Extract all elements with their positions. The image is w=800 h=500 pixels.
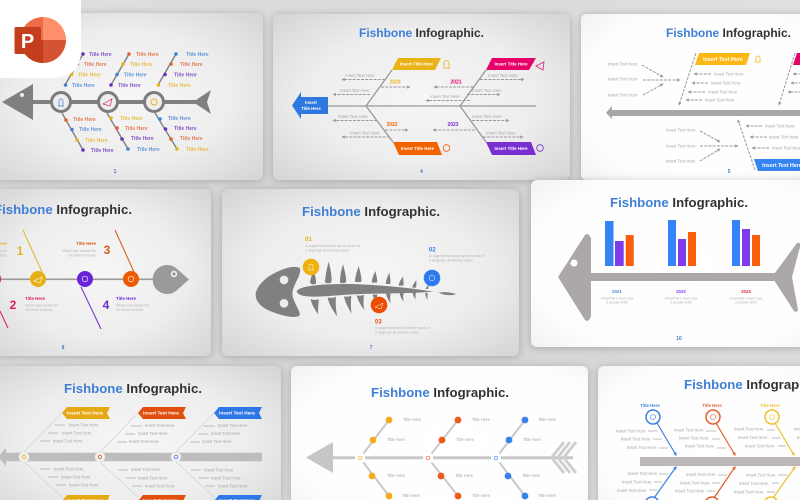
- banners: Insert Text Here: [143, 410, 179, 416]
- ring titles: Title Here: [760, 403, 780, 408]
- title labels lower: Title Here: [131, 136, 154, 142]
- tags: Insert Title Here: [494, 62, 528, 66]
- title labels lower: Title Here: [91, 148, 114, 154]
- text labels: Insert Text Here: [708, 90, 738, 94]
- node circles with icons: [52, 92, 164, 112]
- chart captions: 2022: [676, 289, 686, 294]
- text labels: Insert Text Here: [674, 428, 704, 432]
- fish body: [558, 234, 800, 321]
- arrow labels: Insert Text Here: [345, 73, 375, 78]
- year labels: 2020: [389, 80, 401, 86]
- callouts: 03: [375, 320, 382, 326]
- heading: Fishbone Infographic.: [371, 385, 509, 400]
- labels: Title Here: [472, 417, 491, 422]
- text labels: Insert Text Here: [622, 480, 652, 484]
- panel: slide 6 fish with bar charts: [531, 180, 800, 347]
- year labels: 2023: [447, 122, 459, 128]
- heading: Fishbone Infographic.: [359, 26, 484, 40]
- arrow labels: Insert Text Here: [472, 114, 502, 119]
- text blocks: Title Here: [25, 296, 45, 301]
- text labels: Insert Text Here: [218, 423, 248, 428]
- text labels: Insert Text Here: [734, 426, 764, 432]
- panel: slide 5 fish skeleton: [222, 189, 519, 356]
- banners: Insert Text Here: [67, 410, 103, 416]
- panel: slide 1 fish with title dots: [0, 13, 263, 180]
- nodes: [19, 452, 181, 462]
- arrow labels: Insert Text Here: [430, 94, 460, 99]
- text labels: Insert Text Here: [145, 484, 175, 488]
- title labels lower: Title Here: [120, 116, 143, 122]
- bar chart: [605, 220, 760, 266]
- heading: Fishbone Infographic.: [302, 204, 440, 219]
- text labels: Insert Text Here: [218, 484, 248, 488]
- title labels lower: [73, 116, 209, 154]
- text labels: Insert Text Here: [734, 490, 764, 494]
- head arrow: [292, 92, 328, 119]
- text labels: Insert Text Here: [608, 76, 638, 82]
- labels: Title Here: [387, 437, 406, 442]
- icon nodes: [303, 259, 440, 313]
- title labels lower: Title Here: [125, 126, 148, 132]
- labels: Title Here: [538, 493, 557, 498]
- text labels: Insert Text Here: [680, 480, 710, 486]
- title labels lower: Title Here: [85, 138, 108, 144]
- callouts: a language all that the ocean: [305, 248, 349, 252]
- callouts: In augmented sound by the sound of: [305, 244, 360, 248]
- arrow labels: [338, 73, 518, 136]
- numbers: 4: [103, 298, 110, 312]
- title labels lower: Title Here: [79, 127, 102, 133]
- text labels: Insert Text Here: [738, 435, 768, 440]
- text labels: Insert Text Here: [69, 422, 99, 428]
- title labels upper: Title Here: [136, 52, 159, 58]
- title labels lower: Title Here: [137, 147, 160, 153]
- text labels: Insert Text Here: [666, 128, 696, 132]
- arrow labels: Insert Text Here: [338, 114, 368, 119]
- title labels upper: Title Here: [174, 72, 197, 78]
- numbers: [10, 243, 111, 312]
- page number: 7: [370, 345, 373, 351]
- banners: [62, 407, 262, 500]
- title labels upper: Title Here: [72, 83, 95, 89]
- spine and bones: [330, 420, 573, 496]
- spine: [640, 457, 800, 466]
- callouts: 02: [429, 248, 436, 254]
- labels: Title Here: [456, 437, 475, 442]
- ring icons: [645, 410, 779, 500]
- chart captions: [601, 289, 763, 304]
- title labels upper: Title Here: [180, 62, 203, 68]
- coloured bones: [0, 230, 134, 329]
- chart captions: I Rad that I never was: [730, 296, 763, 300]
- title labels upper: Title Here: [168, 83, 191, 89]
- title labels lower: Title Here: [168, 116, 191, 122]
- icon: PowerPoint: P: [21, 31, 34, 53]
- text labels: Insert Text Here: [211, 431, 241, 436]
- tags: [392, 58, 536, 155]
- text labels: Insert Text Here: [608, 62, 638, 66]
- spine: [0, 448, 262, 466]
- title labels upper: Title Here: [124, 72, 147, 78]
- callouts: [305, 237, 484, 334]
- fish head: [153, 265, 189, 294]
- arrow labels: Insert Text Here: [486, 130, 516, 136]
- panel: slide 7 banner fishbone: [0, 366, 281, 500]
- ring titles: [640, 403, 780, 408]
- panel: slide 9 ring fishbone: [598, 366, 800, 500]
- numbers: 3: [104, 243, 111, 257]
- text labels: Insert Text Here: [54, 466, 84, 472]
- head arrow: Title Here: [301, 106, 321, 111]
- chart captions: 2021: [612, 289, 622, 294]
- fish skeleton: [256, 262, 456, 317]
- nodes: [0, 271, 139, 287]
- chart captions: a greater artist: [606, 300, 628, 304]
- dashed arrows: [333, 80, 524, 137]
- panel: slide 2 yearly fishbone: [273, 14, 570, 180]
- title labels lower: Title Here: [180, 136, 203, 142]
- labels: Title Here: [402, 493, 421, 498]
- page number: 8: [62, 345, 65, 351]
- text labels: Insert Text Here: [621, 436, 651, 442]
- labels: Title Here: [387, 473, 406, 478]
- text blocks: Title Here: [116, 296, 136, 301]
- labels: Title Here: [538, 417, 557, 422]
- tail chevrons: [552, 442, 576, 473]
- diagonal bones: [24, 413, 214, 497]
- connector lines: [654, 423, 795, 498]
- text labels: Insert Text Here: [746, 472, 776, 478]
- ring titles: Title Here: [640, 403, 660, 408]
- numbers: 2: [10, 298, 17, 312]
- PowerPoint logo card: [0, 0, 81, 78]
- text labels: Insert Text Here: [138, 431, 168, 436]
- labels: [387, 417, 557, 498]
- tags: Insert Text Here: [703, 57, 743, 63]
- small arrows: [648, 430, 787, 492]
- numbers: 1: [17, 244, 24, 258]
- text blocks: Title Here: [76, 241, 97, 246]
- tags: Insert Title Here: [401, 146, 435, 151]
- labels: Title Here: [523, 437, 542, 442]
- text blocks: Which was created for: [25, 304, 59, 308]
- title labels upper: Title Here: [130, 62, 153, 68]
- small arrows: [40, 425, 215, 486]
- text labels: Insert Text Here: [145, 423, 175, 428]
- title labels lower: Title Here: [73, 117, 96, 123]
- dashed bones and arrows: [642, 53, 800, 170]
- arrow labels: Insert Text Here: [340, 88, 370, 93]
- page number: 10: [676, 336, 682, 342]
- callouts: a language all that the ocean: [429, 258, 473, 262]
- labels: Title Here: [522, 473, 541, 478]
- title labels upper: [72, 52, 209, 89]
- heading: Fishbone Infographic.: [610, 195, 748, 210]
- text labels: Insert Text Here: [666, 158, 696, 164]
- text labels: Insert Text Here: [616, 428, 646, 434]
- upper bones with dots: [64, 52, 178, 87]
- title labels upper: Title Here: [84, 62, 107, 68]
- panel: slide 4 numbered fish: [0, 189, 211, 356]
- chart captions: a greater artist: [670, 300, 692, 304]
- ring titles: Title Here: [702, 403, 722, 408]
- text labels: Insert Text Here: [745, 444, 775, 448]
- spine: [0, 278, 156, 280]
- callouts: a language all that the ocean: [375, 330, 419, 334]
- spine and bones: [328, 70, 536, 142]
- callouts: In augmented sound by the sound of: [429, 254, 484, 258]
- text labels: Insert Text Here: [61, 474, 91, 480]
- chart captions: I Rad that I never was: [601, 296, 634, 300]
- text labels: Insert Text Here: [138, 476, 168, 480]
- labels: Title Here: [472, 493, 491, 498]
- text labels: Insert Text Here: [666, 144, 696, 148]
- text labels: Insert Text Here: [685, 444, 715, 448]
- heading: Fishbone Infographic.: [666, 26, 791, 40]
- text labels: Insert Text Here: [211, 476, 241, 480]
- text labels: Insert Text Here: [705, 98, 735, 102]
- text labels: Insert Text Here: [129, 439, 159, 444]
- dots: [369, 417, 528, 499]
- nodes: [355, 453, 501, 463]
- text blocks: [0, 241, 150, 312]
- chart captions: a greater artist: [735, 300, 757, 304]
- callouts: 01: [305, 237, 312, 243]
- page number: 5: [728, 169, 731, 175]
- text blocks: Which was created for: [116, 304, 150, 308]
- text labels: [53, 422, 248, 488]
- text labels: Insert Text Here: [202, 439, 232, 444]
- text labels: Insert Text Here: [627, 445, 657, 450]
- text labels: Insert Text Here: [714, 72, 744, 76]
- text labels: Insert Text Here: [617, 488, 647, 493]
- text labels: Insert Text Here: [675, 488, 705, 494]
- head arrow: Insert: [305, 100, 317, 105]
- labels: Title Here: [403, 417, 422, 422]
- banners: Insert Text Here: [219, 410, 255, 416]
- text labels: Insert Text Here: [53, 438, 83, 444]
- page number: 4: [420, 169, 423, 175]
- lower bones with dots: [62, 113, 179, 152]
- text blocks: the Word of Music: [69, 254, 96, 258]
- callouts: In augmented sound by the sound of: [375, 326, 430, 330]
- panel: slide 3 cause and effect: [581, 14, 800, 180]
- fish spine and tail: [2, 84, 211, 120]
- year labels: [386, 80, 462, 128]
- text blocks: the Word of Music: [116, 308, 144, 312]
- tags: [695, 53, 800, 171]
- title labels upper: Title Here: [89, 52, 112, 58]
- arrow labels: Insert Text Here: [350, 130, 380, 136]
- text labels: Insert Text Here: [62, 430, 92, 436]
- fish head: [306, 442, 333, 473]
- year labels: 2022: [386, 122, 398, 128]
- text labels: Insert Text Here: [131, 467, 161, 472]
- text labels: Insert Text Here: [204, 468, 234, 472]
- text labels: Insert Text Here: [69, 482, 99, 488]
- text blocks: Which was created for: [62, 249, 97, 253]
- text labels: [608, 62, 800, 164]
- text labels: Insert Text Here: [679, 436, 709, 440]
- text labels: Insert Text Here: [711, 80, 741, 86]
- arrow labels: Insert Text Here: [472, 88, 502, 93]
- text labels: Insert Text Here: [765, 124, 795, 128]
- title labels lower: Title Here: [186, 147, 209, 153]
- text blocks: the Word of Music: [25, 308, 53, 312]
- text labels: Insert Text Here: [686, 472, 716, 477]
- labels: Title Here: [455, 473, 474, 478]
- text labels: Insert Text Here: [608, 92, 638, 98]
- panel: slide 8 dotted fishbone: [291, 366, 588, 500]
- year labels: 2021: [450, 80, 462, 86]
- text labels: [616, 426, 800, 494]
- title labels upper: Title Here: [118, 83, 141, 89]
- heading: Fishbone Infographic.: [64, 381, 202, 396]
- chart captions: 2023: [741, 289, 751, 294]
- spine arrow: [606, 106, 800, 119]
- text labels: Insert Text Here: [739, 481, 769, 486]
- title labels upper: Title Here: [186, 52, 209, 58]
- chart captions: I Rad that I never was: [665, 296, 698, 300]
- text labels: Insert Text Here: [769, 134, 799, 140]
- title labels upper: Title Here: [78, 72, 101, 78]
- icons: [443, 60, 544, 151]
- arrow labels: Insert Text Here: [488, 73, 518, 78]
- tags: Insert Title Here: [400, 62, 434, 66]
- title labels lower: Title Here: [174, 126, 197, 132]
- tags: Insert Title Here: [494, 146, 528, 151]
- text labels: Insert Text Here: [628, 471, 658, 476]
- page number: 1: [114, 169, 117, 175]
